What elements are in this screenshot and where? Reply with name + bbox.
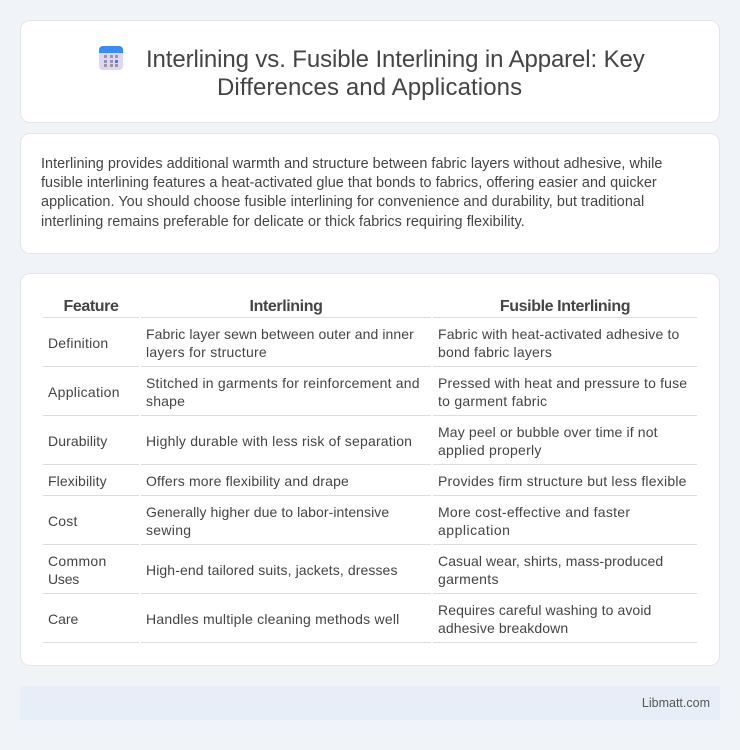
row: Durability: May peel or bubble over time if not — [438, 424, 658, 440]
row: Application: shape — [146, 393, 185, 409]
row: Cost: More cost-effective and faster — [438, 504, 630, 520]
row: Definition: bond fabric layers — [438, 344, 552, 360]
row: Application: Pressed with heat and pressure to fuse — [438, 375, 687, 391]
row: Definition — [48, 326, 679, 360]
row: Cost: sewing — [146, 522, 191, 538]
row: Durability: Highly durable with less risk of separation — [146, 433, 412, 449]
icon: calendar — [99, 46, 123, 70]
row: Cost: Generally higher due to labor-intensive — [146, 504, 389, 520]
row: Cost: application — [438, 522, 510, 538]
text block: introduction — [41, 156, 662, 230]
row: Care: Handles multiple cleaning methods well — [146, 611, 400, 627]
panel: header — [20, 20, 720, 123]
row: Durability — [48, 424, 658, 458]
row: Application: Application — [48, 384, 120, 400]
text block: introduction: Interlining provides additional warmth and structure between fabric layers without adhesive, while — [41, 156, 662, 172]
row: Application: to garment fabric — [438, 393, 547, 409]
title — [146, 46, 645, 101]
table header: Feature — [64, 298, 118, 315]
row: Care: Requires careful washing to avoid — [438, 602, 651, 618]
table header: Interlining — [250, 298, 322, 315]
panel: comparison table — [20, 273, 720, 666]
panel: introduction — [20, 133, 720, 254]
row: Definition: layers for structure — [146, 344, 267, 360]
row: Definition: Definition — [48, 335, 108, 351]
row: Flexibility — [48, 473, 687, 489]
row: Care: adhesive breakdown — [438, 620, 568, 636]
row: Cost: Cost — [48, 513, 78, 529]
row: Cost — [48, 504, 630, 538]
title: Interlining vs. Fusible Interlining in Apparel: Key — [146, 46, 645, 73]
text block: introduction: interlining remains preferable for delicate or thick fabrics requiring flexibility. — [41, 214, 525, 230]
row: Durability: Durability — [48, 433, 107, 449]
row: Common Uses: garments — [438, 571, 499, 587]
footer — [20, 686, 720, 720]
row: Flexibility: Provides firm structure but less flexible — [438, 473, 687, 489]
row: Definition: Fabric with heat-activated adhesive to — [438, 326, 679, 342]
row: Care: Care — [48, 611, 78, 627]
row: Common Uses: Uses — [48, 571, 79, 587]
row: Common Uses: Casual wear, shirts, mass-produced — [438, 553, 663, 569]
row: Application — [48, 375, 687, 409]
row: Definition: Fabric layer sewn between outer and inner — [146, 326, 414, 342]
text block: introduction: application. You should choose fusible interlining for convenience and durability, but traditional — [41, 194, 644, 210]
row: Common Uses: Common — [48, 553, 107, 569]
row: Common Uses: High-end tailored suits, jackets, dresses — [146, 562, 398, 578]
text block: introduction: fusible interlining features a heat-activated glue that bonds to fabrics, offering easier and quicker — [41, 175, 657, 191]
row: Durability: applied properly — [438, 442, 542, 458]
row: Care — [48, 602, 651, 636]
row: Flexibility: Offers more flexibility and drape — [146, 473, 349, 489]
row: Flexibility: Flexibility — [48, 473, 107, 489]
table header: Fusible Interlining — [500, 298, 630, 315]
row: Application: Stitched in garments for reinforcement and — [146, 375, 420, 391]
row: Common Uses — [48, 553, 663, 587]
table header — [64, 298, 630, 315]
footer credit: Libmatt.com — [642, 696, 710, 710]
title: Differences and Applications — [217, 74, 522, 101]
